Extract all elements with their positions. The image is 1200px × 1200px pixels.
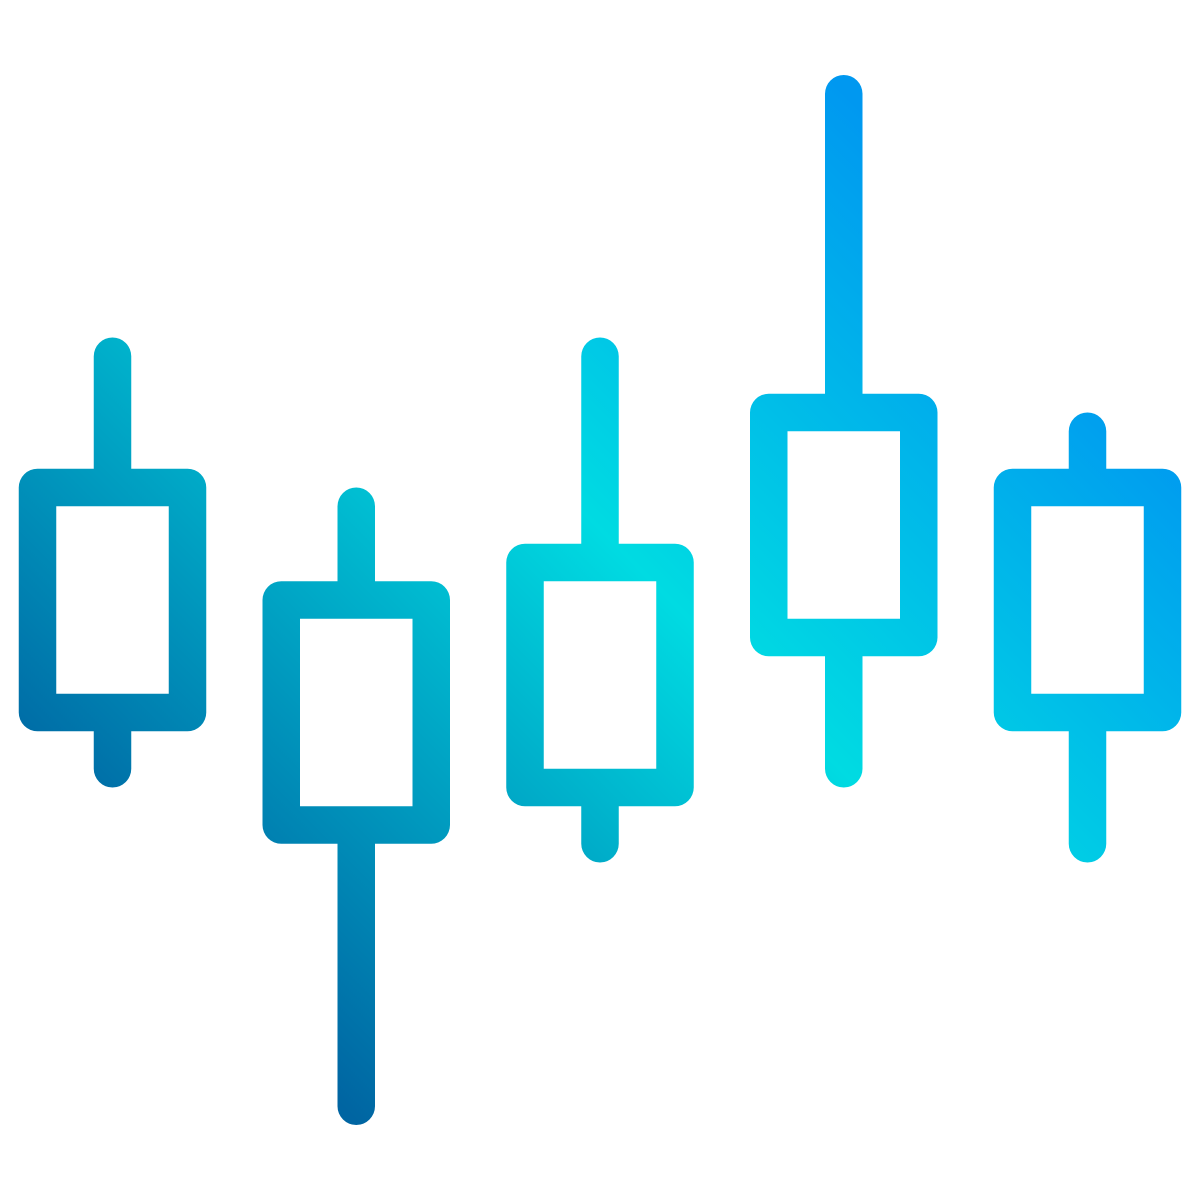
candle 3 bbox=[525, 356, 675, 844]
candle 5 bbox=[1012, 431, 1162, 844]
candle 2 bbox=[281, 506, 431, 1106]
candle 1 bbox=[38, 356, 188, 769]
candle 4 bbox=[769, 94, 919, 769]
